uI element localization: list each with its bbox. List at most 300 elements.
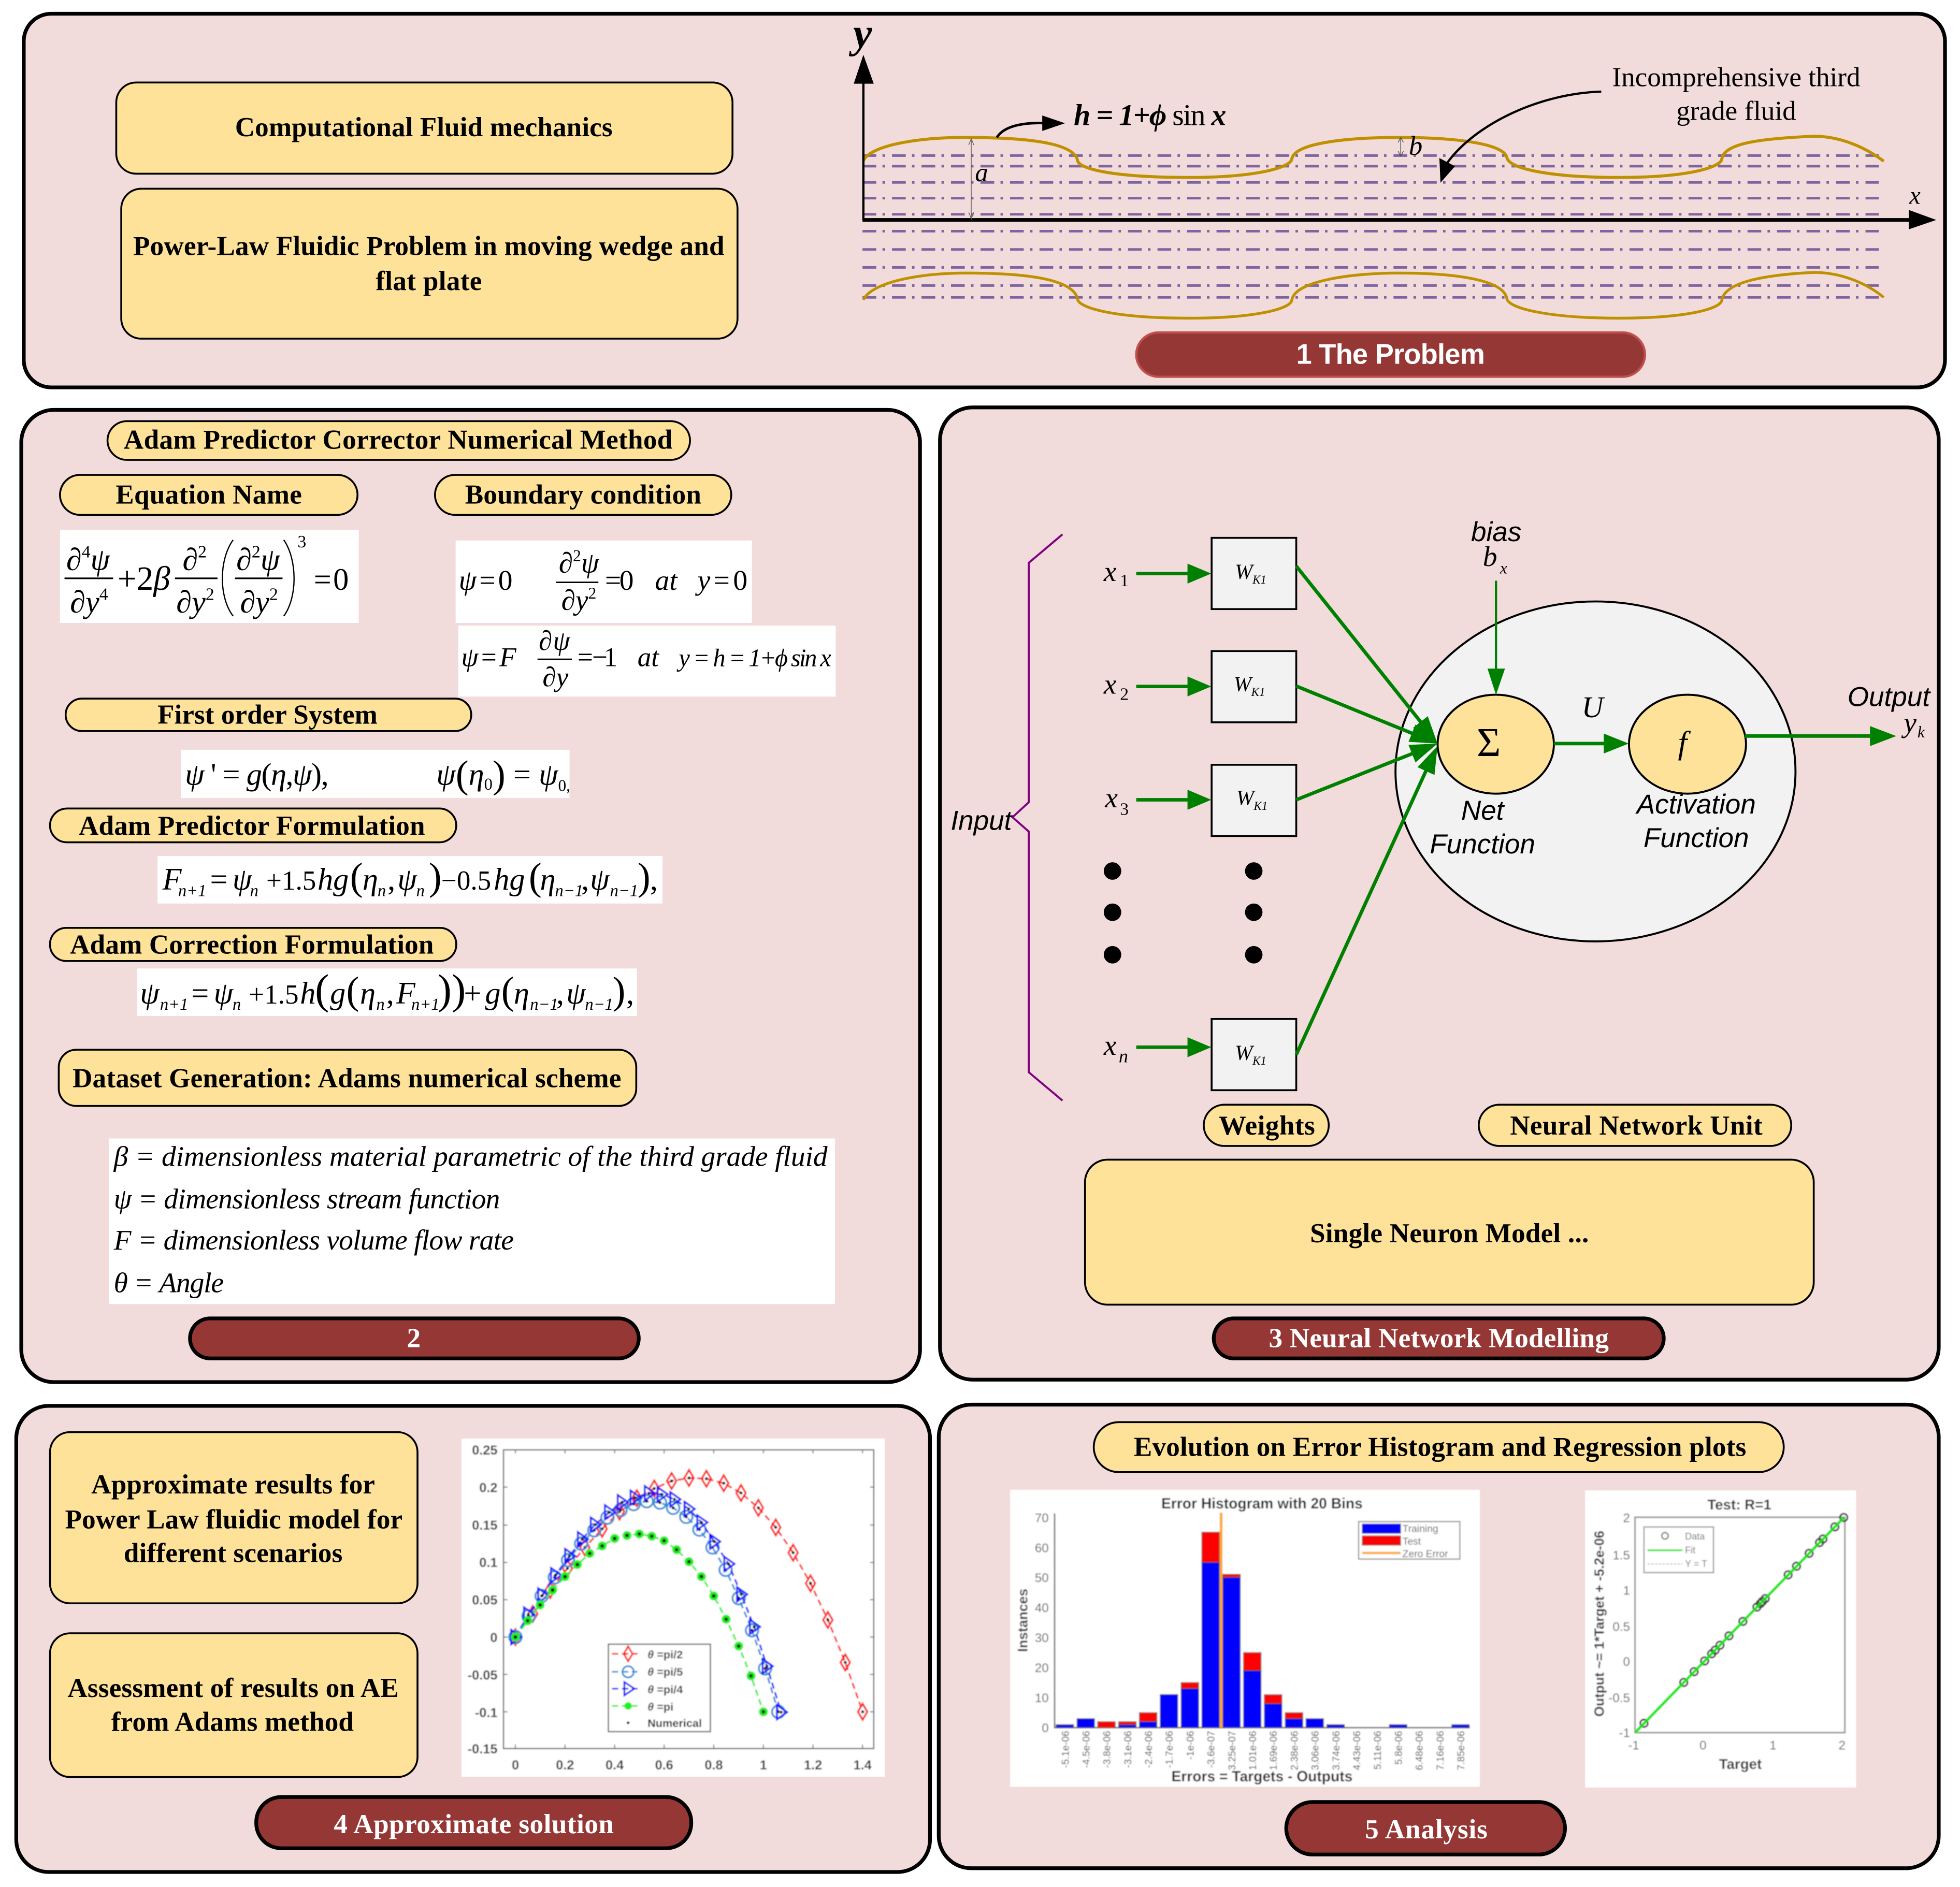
- equation: first order: (: [456, 753, 469, 796]
- weighted connections: [1296, 566, 1437, 1055]
- equation: boundary at y=h: ψ = F: [462, 642, 516, 672]
- equation: boundary at y=h: y = h = 1+ϕ sin x: [676, 644, 831, 672]
- equation: governing: [60, 530, 359, 623]
- chart legend: θ =pi/2: [647, 1648, 683, 1661]
- equation: boundary at y=0: 2: [573, 547, 581, 565]
- input brace: Input: [950, 805, 1013, 836]
- box: power-law fluidic problem: Power-Law Fluidic Problem in moving wedge and: [133, 231, 724, 261]
- input row 1: W: [1235, 559, 1255, 583]
- x axis labels: 7.85e-06: [1456, 1731, 1467, 1770]
- equation: first order: 0,: [558, 777, 570, 795]
- panel: 2 numerical method: [21, 410, 920, 1382]
- heading: weights: Weights: [1219, 1111, 1315, 1141]
- chart legend: Numerical: [647, 1717, 702, 1730]
- regression chart: Output ~= 1*Target + -5.2e-06: [1591, 1531, 1607, 1717]
- equation: corrector: (: [346, 969, 359, 1012]
- x axis: x: [1909, 182, 1921, 209]
- label: incomprehensive fluid: grade fluid: [1676, 96, 1796, 126]
- badge: 4 approximate solution: 4 Approximate solution: [334, 1809, 614, 1839]
- equation: corrector: ,: [386, 976, 394, 1011]
- equation: boundary at y=h: [458, 626, 836, 696]
- neuron unit ellipse: [1395, 601, 1795, 941]
- x axis labels: [512, 1758, 872, 1773]
- box: assessment of results: Assessment of results on AE: [67, 1673, 399, 1703]
- equation: governing: 2: [269, 585, 278, 604]
- equation: predictor: n−1: [610, 881, 638, 900]
- badge: 1 the problem: [1136, 332, 1645, 377]
- histogram chart: Instances: [1015, 1589, 1031, 1652]
- box: computational fluid mechanics: Computational Fluid mechanics: [235, 112, 613, 142]
- equation: first order: ψ ' = g(η,ψ),: [185, 758, 329, 792]
- box: approximate results: Power Law fluidic model for: [65, 1504, 402, 1534]
- chart legend: θ =pi: [647, 1701, 673, 1714]
- y axis labels: 10: [1035, 1691, 1049, 1705]
- y axis labels: [468, 1443, 497, 1757]
- equation: first order: η: [469, 758, 484, 792]
- y axis labels: -0.15: [468, 1742, 497, 1757]
- equation: governing: 2: [252, 542, 261, 561]
- histogram chart: [1010, 1490, 1480, 1787]
- equation: predictor: [157, 855, 662, 904]
- x axis labels: 3.25e-07: [1227, 1731, 1238, 1770]
- heading: first order system: [66, 699, 471, 731]
- box: computational fluid mechanics: [116, 82, 732, 173]
- equation: predictor: ψ: [233, 862, 253, 897]
- input row 3: K1: [1253, 800, 1267, 812]
- dimension b: [1398, 131, 1422, 161]
- heading: neural network unit: [1479, 1105, 1791, 1146]
- label: activation function: Function: [1644, 823, 1749, 853]
- dimension a: [969, 139, 988, 219]
- y axis labels: 0.2: [479, 1480, 497, 1495]
- lower wavy wall: [863, 272, 1884, 318]
- x axis labels: -4.5e-06: [1081, 1731, 1092, 1768]
- equation: predictor: ,: [581, 862, 589, 897]
- equation: first order: ψ: [436, 758, 456, 792]
- equation: corrector: F: [396, 976, 416, 1011]
- regression chart: [1585, 1490, 1856, 1788]
- equation: corrector: =: [191, 976, 209, 1011]
- input row 2: x: [1103, 669, 1117, 700]
- equation: predictor: F: [162, 862, 182, 897]
- x axis labels: 5.11e-06: [1373, 1731, 1383, 1769]
- output arrow: [1745, 681, 1931, 746]
- equation: boundary at y=0: y = 0: [695, 565, 747, 597]
- equation: predictor: ): [429, 855, 442, 898]
- equation: boundary at y=0: ∂y: [561, 585, 588, 617]
- regression y labels: [1608, 1511, 1630, 1740]
- arrow: to h: [997, 115, 1065, 137]
- y axis: [848, 10, 874, 220]
- y axis labels: 0: [490, 1631, 497, 1645]
- y axis labels: 30: [1035, 1631, 1049, 1645]
- box: assessment of results: from Adams method: [111, 1707, 354, 1737]
- x axis labels: 0.4: [606, 1758, 624, 1773]
- equation: boundary at y=h: = −1: [578, 642, 617, 672]
- equation: predictor: −0.5: [441, 866, 491, 896]
- label: incomprehensive fluid: Incomprehensive third: [1612, 63, 1861, 93]
- input row 1: [1103, 538, 1296, 609]
- equation: first order: ): [493, 753, 506, 796]
- input brace: [950, 534, 1062, 1100]
- dimension b: b: [1409, 131, 1422, 161]
- badge: 2: [190, 1318, 639, 1358]
- x axis labels: -3.8e-06: [1102, 1731, 1113, 1768]
- equation: predictor: n: [416, 881, 425, 900]
- fluid flow lines: [862, 155, 1879, 297]
- equation: governing: ψ: [91, 542, 111, 577]
- box: power-law fluidic problem: flat plate: [376, 266, 482, 296]
- bias input: x: [1500, 559, 1507, 577]
- equation: corrector: n+1: [411, 995, 440, 1014]
- panel: 1 the problem: [24, 10, 1945, 387]
- equation: governing: 3: [297, 532, 306, 551]
- equation: boundary at y=0: ψ = 0: [459, 565, 512, 597]
- label: incomprehensive fluid: [1612, 63, 1861, 126]
- input row 3: 3: [1120, 800, 1129, 819]
- bias input: b: [1483, 541, 1497, 573]
- x axis labels: 4.43e-06: [1352, 1731, 1363, 1770]
- histogram legend: Training: [1403, 1524, 1438, 1535]
- equation: first order: [181, 750, 570, 798]
- equation: corrector: ,: [556, 976, 564, 1011]
- series theta pi/2: [515, 1478, 862, 1712]
- input row n: n: [1119, 1046, 1128, 1066]
- equation: corrector: ,: [626, 976, 634, 1011]
- box: dataset generation: Dataset Generation: Adams numerical scheme: [73, 1064, 621, 1094]
- regression y labels: -1: [1619, 1726, 1630, 1740]
- x axis labels: -5.1e-06: [1060, 1731, 1071, 1768]
- regression y labels: 0: [1623, 1655, 1630, 1669]
- equation: predictor: ,: [387, 862, 395, 897]
- x axis labels: 7.16e-06: [1435, 1731, 1446, 1770]
- chart legend: θ =pi/4: [647, 1683, 683, 1696]
- equation: boundary at y=0: = 0: [605, 565, 634, 597]
- regression chart: Test: R=1: [1707, 1497, 1771, 1513]
- regression x labels: 2: [1838, 1739, 1846, 1753]
- panel: 4 approximate solution: [16, 1406, 930, 1872]
- chart legend: θ =pi/5: [647, 1665, 683, 1678]
- x axis labels: -3.1e-06: [1123, 1731, 1134, 1768]
- zero error line: [1220, 1513, 1222, 1728]
- output arrow: y: [1901, 707, 1916, 739]
- equation: governing: ∂y: [176, 585, 206, 619]
- equation: predictor: n−1: [555, 881, 583, 900]
- regression y labels: -0.5: [1608, 1691, 1630, 1705]
- definitions: [109, 1138, 835, 1304]
- box: approximate results: [50, 1432, 417, 1603]
- x axis labels: 1.01e-06: [1248, 1731, 1259, 1770]
- label: activation function: Activation: [1635, 789, 1756, 820]
- definitions: β = dimensionless material parametric of the third grade fluid: [113, 1141, 828, 1173]
- input row 2: W: [1234, 672, 1253, 696]
- arrow: to fluid: [1439, 92, 1601, 183]
- badge: 3 neural network modelling: 3 Neural Network Modelling: [1269, 1323, 1609, 1353]
- definitions: F = dimensionless volume flow rate: [113, 1225, 514, 1256]
- histogram chart: Error Histogram with 20 Bins: [1161, 1495, 1363, 1512]
- equation: governing: +2β: [118, 560, 170, 598]
- series theta pi/5: [515, 1501, 779, 1712]
- y axis labels: -0.1: [475, 1706, 497, 1720]
- definitions: ψ = dimensionless stream function: [114, 1184, 500, 1215]
- equation: boundary at y=0: 2: [588, 584, 596, 602]
- x axis labels: -3.6e-07: [1206, 1731, 1217, 1768]
- equation: corrector: )): [438, 966, 466, 1013]
- badge: 2: 2: [407, 1323, 421, 1353]
- fit line: [1635, 1517, 1844, 1733]
- regression legend: Y = T: [1685, 1559, 1707, 1569]
- heading: adam predictor corrector: Adam Predictor Corrector Numerical Method: [124, 425, 672, 455]
- equation: predictor: (: [350, 855, 363, 898]
- equation: corrector: [137, 966, 637, 1016]
- histogram legend: Zero Error: [1403, 1549, 1448, 1560]
- panel: 3 neural network modelling: [940, 408, 1939, 1380]
- regression x labels: [1628, 1739, 1846, 1753]
- regression legend: Fit: [1685, 1545, 1695, 1556]
- equation: governing: 4: [99, 585, 108, 604]
- x axis labels: [1060, 1731, 1467, 1770]
- equation: corrector: ψ: [566, 976, 586, 1011]
- histogram chart: Errors = Targets - Outputs: [1171, 1768, 1352, 1784]
- equation: corrector: n−1: [585, 995, 613, 1014]
- net function node: [1437, 695, 1554, 794]
- heading: first order system: First order System: [157, 700, 378, 730]
- x axis labels: -1.7e-06: [1164, 1731, 1175, 1768]
- equation: corrector: ): [613, 969, 625, 1012]
- badge: 4 approximate solution: [256, 1797, 691, 1848]
- equation: corrector: n: [233, 995, 241, 1014]
- equation: predictor: ): [638, 855, 651, 898]
- heading: boundary condition: Boundary condition: [465, 480, 701, 510]
- heading: adam predictor formulation: Adam Predictor Formulation: [79, 811, 425, 841]
- equation: corrector: η: [514, 976, 529, 1011]
- regression legend: Data: [1685, 1531, 1705, 1542]
- equation: corrector: n−1: [530, 995, 558, 1014]
- regression x labels: -1: [1628, 1739, 1639, 1753]
- y axis labels: 50: [1035, 1571, 1049, 1585]
- net function node: Σ: [1477, 720, 1501, 765]
- regression y labels: 0.5: [1612, 1620, 1630, 1634]
- equation: corrector: n: [376, 995, 385, 1014]
- equation: predictor: hg: [318, 862, 349, 897]
- x axis labels: 0: [512, 1758, 519, 1773]
- equation: corrector: g: [330, 976, 345, 1011]
- equation: governing: ∂: [236, 542, 252, 577]
- equation: governing: = 0: [314, 562, 349, 597]
- x axis labels: 1.4: [854, 1758, 872, 1773]
- input row n: K1: [1252, 1054, 1266, 1067]
- heading: evolution on error histogram: Evolution on Error Histogram and Regression plots: [1134, 1432, 1746, 1462]
- definitions: θ = Angle: [114, 1267, 224, 1299]
- equation: corrector: h: [300, 976, 315, 1011]
- equation: predictor: η: [540, 862, 555, 897]
- heading: equation name: [60, 475, 357, 515]
- regression x labels: 1: [1769, 1739, 1777, 1753]
- equation: boundary at y=0: at: [655, 565, 678, 597]
- equation: predictor: hg: [494, 862, 525, 897]
- equation: predictor: ψ: [590, 862, 610, 897]
- equation: governing: 4: [82, 542, 91, 561]
- panel: 5 analysis: [939, 1404, 1939, 1868]
- input row 3: x: [1104, 782, 1118, 814]
- ellipsis dots: [1104, 862, 1262, 964]
- histogram bars: [1056, 1532, 1469, 1728]
- input row 2: 2: [1120, 685, 1129, 704]
- equation: predictor: +1.5: [266, 866, 316, 896]
- equation: corrector: g: [485, 976, 501, 1011]
- output arrow: Output: [1848, 681, 1931, 712]
- x axis: [862, 182, 1936, 229]
- equation: boundary at y=0: ψ: [581, 547, 600, 579]
- input row 3: [1104, 765, 1296, 836]
- input row n: W: [1235, 1040, 1255, 1064]
- equation: corrector: (: [501, 969, 514, 1012]
- input row 3: W: [1236, 786, 1256, 809]
- equation: governing: ∂y: [70, 585, 99, 619]
- box: single neuron model: Single Neuron Model ...: [1310, 1218, 1589, 1249]
- equation: governing: ψ: [261, 542, 281, 577]
- equation: governing: 2: [206, 585, 214, 604]
- equation: corrector: +: [464, 976, 481, 1011]
- line chart: solutions: [462, 1439, 885, 1777]
- x axis labels: 1: [760, 1758, 767, 1773]
- equation: governing: ∂: [182, 542, 198, 577]
- series theta pi/4: [515, 1493, 781, 1712]
- x axis labels: 0.2: [556, 1758, 574, 1773]
- equation: corrector: η: [360, 976, 376, 1011]
- activation function node: f: [1678, 724, 1691, 761]
- heading: equation name: Equation Name: [116, 480, 302, 510]
- equation: predictor: n: [378, 881, 386, 900]
- output arrow: k: [1918, 723, 1925, 741]
- dimension a: a: [975, 158, 988, 187]
- equation: predictor: (: [529, 855, 542, 898]
- equation: governing: 2: [198, 542, 207, 561]
- y axis labels: 20: [1035, 1661, 1049, 1675]
- y axis labels: -0.05: [468, 1668, 497, 1682]
- heading: adam correction formulation: Adam Correction Formulation: [70, 930, 434, 960]
- equation: governing: ∂y: [240, 585, 269, 619]
- equation: corrector: (: [315, 966, 329, 1013]
- badge: 3 neural network modelling: [1214, 1318, 1664, 1358]
- y axis labels: 60: [1035, 1541, 1049, 1555]
- arrow: u: U: [1582, 690, 1605, 724]
- regression y labels: 2: [1623, 1511, 1630, 1525]
- data points: [1640, 1514, 1848, 1727]
- box: single neuron model: [1085, 1159, 1814, 1304]
- equation: corrector: ψ: [214, 976, 234, 1011]
- label: activation function: [1635, 789, 1756, 853]
- regression legend: [1644, 1527, 1713, 1573]
- x axis labels: 3.74e-06: [1331, 1731, 1342, 1770]
- equation: predictor: =: [210, 862, 227, 897]
- label: net function: Net: [1461, 795, 1505, 826]
- y axis labels: 40: [1035, 1601, 1049, 1615]
- badge: 5 analysis: 5 Analysis: [1365, 1815, 1488, 1845]
- input row 1: K1: [1252, 573, 1266, 586]
- equation: boundary at y=0: ∂: [559, 547, 573, 579]
- regression x labels: 0: [1699, 1739, 1707, 1753]
- y axis labels: [1035, 1511, 1049, 1735]
- regression y labels: 1.5: [1612, 1549, 1630, 1563]
- chart legend: [609, 1644, 710, 1732]
- heading: evolution on error histogram: [1094, 1422, 1784, 1472]
- y axis: y: [848, 10, 872, 57]
- y axis labels: 70: [1035, 1511, 1049, 1525]
- label: net function: Function: [1430, 829, 1535, 860]
- regression y labels: 1: [1623, 1584, 1630, 1598]
- x axis labels: 0.6: [655, 1758, 673, 1773]
- y axis labels: 0.05: [472, 1593, 497, 1608]
- equation: boundary at y=h: ∂ ψ: [539, 626, 570, 656]
- histogram legend: Test: [1403, 1536, 1421, 1547]
- x axis labels: -1e-06: [1185, 1731, 1196, 1760]
- x axis labels: 1.2: [804, 1758, 822, 1773]
- y axis labels: 0.15: [472, 1518, 497, 1533]
- x axis labels: 1.69e-06: [1269, 1731, 1279, 1770]
- y axis labels: 0.25: [472, 1443, 497, 1458]
- arrow: u: [1554, 690, 1628, 753]
- equation: boundary at y=h: at: [638, 642, 659, 672]
- equation: boundary at y=h: ∂y: [542, 662, 569, 692]
- x axis labels: 0.8: [704, 1758, 723, 1773]
- heading: weights: [1204, 1105, 1329, 1146]
- x axis labels: 6.48e-06: [1415, 1731, 1425, 1770]
- x axis labels: 3.06e-06: [1310, 1731, 1321, 1770]
- y axis labels: 0: [1042, 1721, 1049, 1735]
- equation: predictor: ,: [650, 862, 658, 897]
- label: net function: [1430, 795, 1535, 860]
- regression chart: Target: [1719, 1756, 1762, 1772]
- equation: predictor: ψ: [397, 862, 417, 897]
- box: power-law fluidic problem: [121, 188, 738, 339]
- badge: 5 analysis: [1286, 1802, 1565, 1854]
- activation function node: [1629, 695, 1746, 794]
- x axis labels: -2.4e-06: [1144, 1731, 1155, 1768]
- equation: first order: =: [506, 758, 539, 792]
- input row 2: K1: [1251, 686, 1265, 699]
- equation: first order: 0: [484, 775, 493, 794]
- badge: 1 the problem: 1 The Problem: [1296, 338, 1485, 370]
- box: dataset generation: [59, 1050, 636, 1106]
- heading: neural network unit: Neural Network Unit: [1510, 1111, 1763, 1141]
- box: approximate results: Approximate results for: [91, 1470, 375, 1500]
- heading: boundary condition: [435, 475, 731, 515]
- equation: predictor: n: [250, 881, 258, 900]
- bias input: bias: [1471, 517, 1521, 547]
- equation: h: h = 1+ϕ sin x: [1074, 98, 1226, 132]
- input row 1: x: [1103, 556, 1117, 588]
- input row n: [1103, 1019, 1296, 1090]
- bias input: [1471, 517, 1521, 695]
- y axis labels: 0.1: [479, 1556, 497, 1570]
- upper wavy wall: [863, 136, 1884, 178]
- equation: predictor: η: [363, 862, 378, 897]
- histogram legend: [1359, 1521, 1460, 1560]
- x axis labels: 2.38e-06: [1289, 1731, 1300, 1770]
- input row n: x: [1103, 1030, 1117, 1062]
- box: assessment of results: [50, 1633, 417, 1777]
- input row 2: [1103, 651, 1296, 722]
- equation: boundary at y=0: [456, 541, 752, 623]
- equation: corrector: n+1: [160, 995, 188, 1014]
- equation: governing: ∂: [66, 542, 82, 577]
- input row 1: 1: [1120, 571, 1129, 590]
- equation: predictor: n+1: [178, 881, 206, 900]
- equation: corrector: +1.5: [249, 980, 299, 1010]
- equation: corrector: ψ: [140, 976, 160, 1011]
- series theta pi: [515, 1534, 763, 1712]
